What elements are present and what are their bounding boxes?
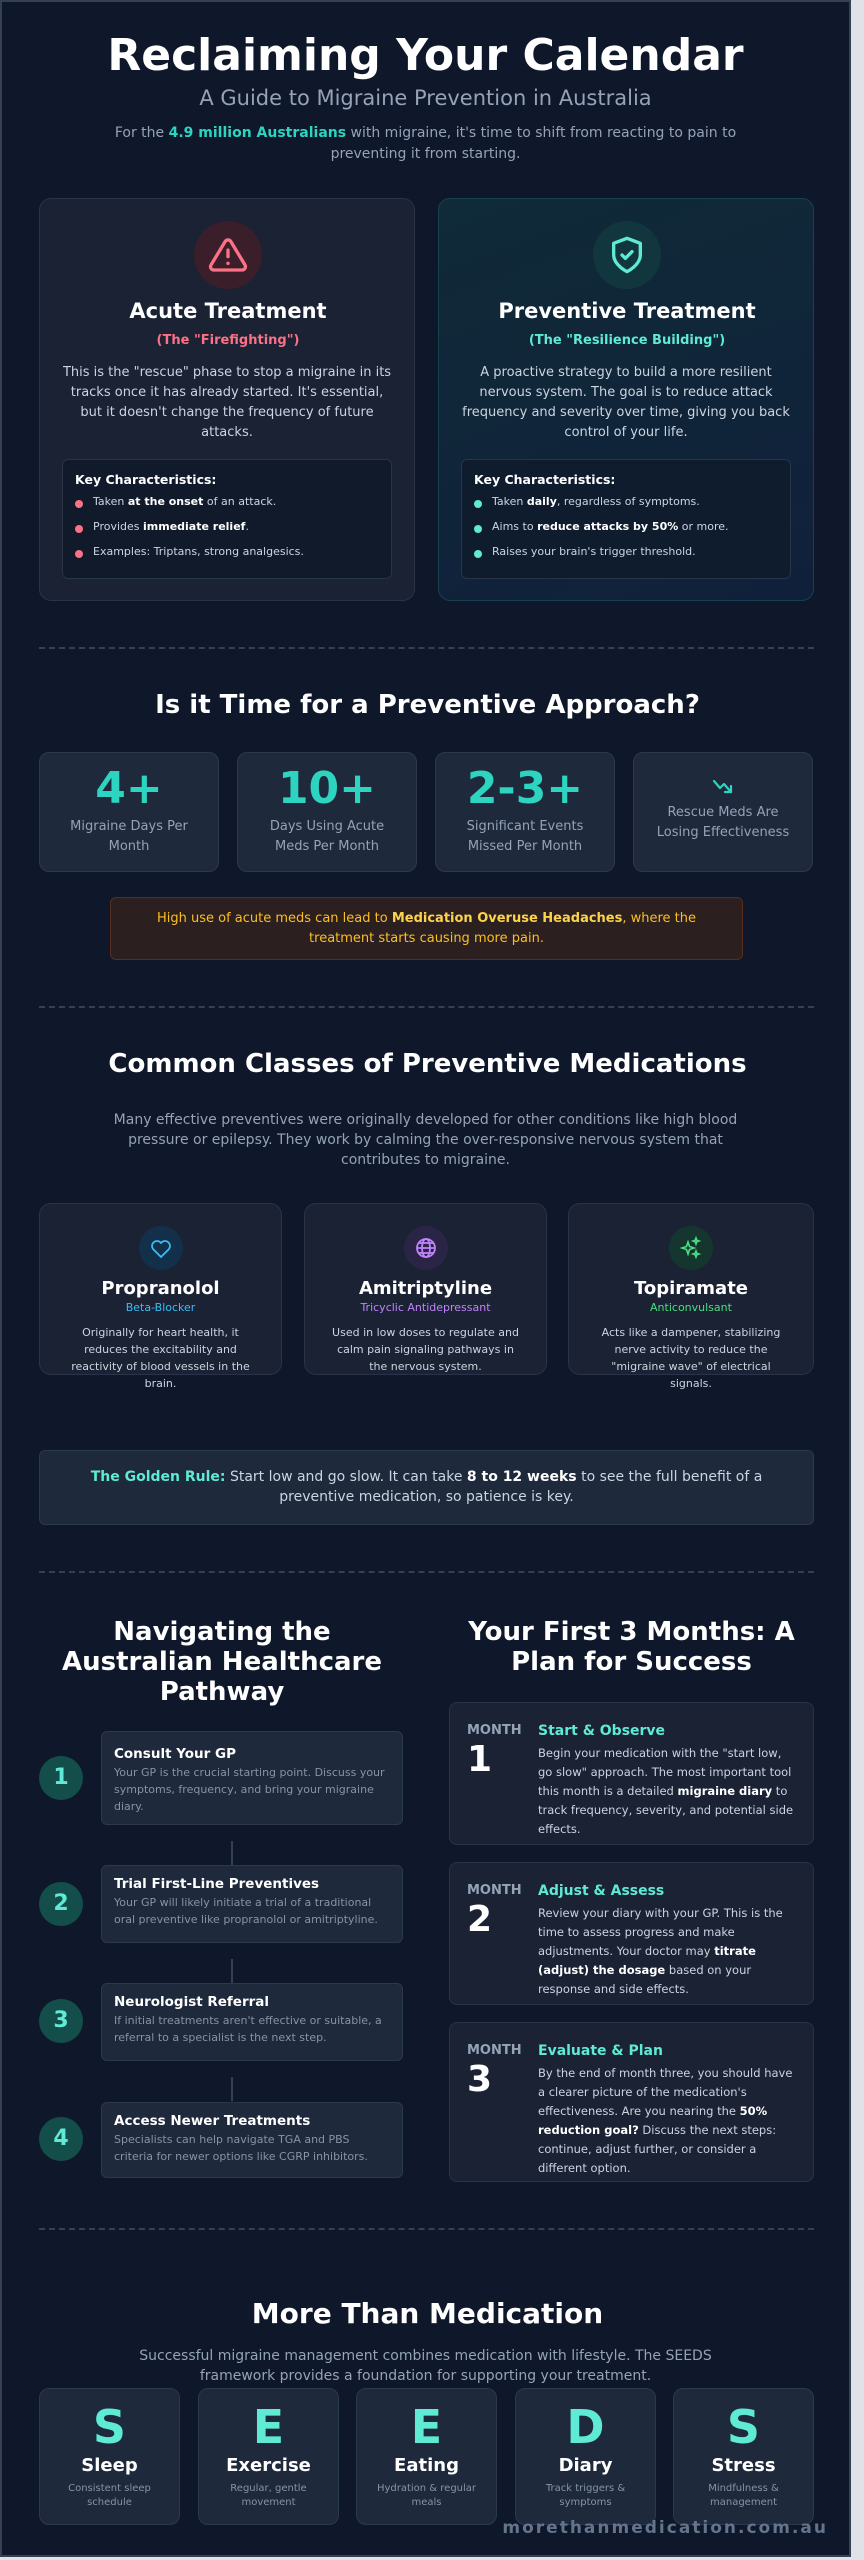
seeds: diary: Diary [559, 2455, 612, 2476]
subheading: (The "Firefighting") [157, 333, 299, 348]
stat: 2-3+: Significant Events Missed Per Month [467, 819, 583, 854]
month 1: Begin your medication with the "start low, go slow" approach. The most important tool this month is a detailed migraine diary to track frequency, severity, and potential side effects. [538, 1746, 793, 1836]
card: propranolol: Originally for heart health, it reduces the excitability and reactivity of blood vessels in the brain. [71, 1326, 250, 1390]
heading: healthcare pathway: Navigating the Australian Healthcare Pathway [62, 1617, 382, 1707]
step 2: 2 [53, 1891, 69, 1916]
intro text: Successful migraine management combines medication with lifestyle. The SEEDS framework provides a foundation for supporting your treatment. [139, 2348, 712, 2384]
seeds: diary: Track triggers & symptoms [546, 2483, 625, 2508]
callout: medication overuse: High use of acute meds can lead to Medication Overuse Headaches, where the treatment starts causing more pain. [157, 911, 696, 946]
card: amitriptyline [304, 1203, 547, 1375]
description: This is the "rescue" phase to stop a migraine in its tracks once it has already started. It's essential, but it doesn't change the frequency of future attacks. [63, 365, 391, 440]
stat: 10+: Days Using Acute Meds Per Month [270, 819, 384, 854]
panel: acute treatment [39, 198, 415, 601]
card: amitriptyline: Tricyclic Antidepressant [360, 1301, 491, 1314]
card: topiramate: Acts like a dampener, stabilizing nerve activity to reduce the "migraine wave" of electrical signals. [602, 1326, 780, 1390]
stat: 10+ [237, 752, 417, 872]
month 3 [449, 2022, 814, 2182]
month 3: Evaluate & Plan [538, 2043, 663, 2059]
step 1: 1 [53, 1765, 69, 1790]
month 1: 1 [467, 1739, 492, 1780]
icon: warning [194, 221, 262, 289]
card: amitriptyline: Amitriptyline [359, 1278, 492, 1299]
key characteristics: Taken daily, regardless of symptoms. [492, 495, 700, 508]
month 2 [449, 1862, 814, 2005]
subtitle: A Guide to Migraine Prevention in Australia [199, 86, 652, 110]
seeds: stress: S [727, 2400, 760, 2454]
card: topiramate [568, 1203, 814, 1375]
key characteristics: Aims to reduce attacks by 50% or more. [492, 520, 729, 533]
seeds: diary: D [566, 2400, 605, 2454]
step 2 [39, 1882, 83, 1926]
subheading: (The "Resilience Building") [529, 333, 725, 348]
seeds: sleep [39, 2388, 180, 2525]
seeds: exercise: Exercise [226, 2455, 311, 2476]
key characteristics: Examples: Triptans, strong analgesics. [93, 545, 304, 558]
seeds: sleep: Consistent sleep schedule [68, 2483, 151, 2508]
stat: 10+: 10+ [278, 763, 376, 814]
key characteristics: Provides immediate relief. [93, 520, 249, 533]
key characteristics: Taken at the onset of an attack. [93, 495, 276, 508]
card: amitriptyline: Used in low doses to regulate and calm pain signaling pathways in the nervous system. [332, 1326, 519, 1373]
seeds: sleep: S [93, 2400, 126, 2454]
card: propranolol: Beta-Blocker [126, 1301, 195, 1314]
step 4: 4 [53, 2126, 69, 2151]
callout: golden rule: The Golden Rule: Start low and go slow. It can take 8 to 12 weeks to see the full benefit of a preventive medication, so patience is key. [91, 1469, 762, 1505]
stat: 2-3+: 2-3+ [467, 763, 583, 814]
key characteristics [62, 459, 392, 579]
step 3: 3 [53, 2008, 69, 2033]
stat: 2-3+ [435, 752, 615, 872]
text: If initial treatments aren't effective or suitable, a referral to a specialist is the next step. [114, 2014, 382, 2044]
month 1: Start & Observe [538, 1723, 665, 1739]
callout: medication overuse [110, 897, 743, 960]
stat: rescue meds: Rescue Meds Are Losing Effectiveness [657, 805, 789, 840]
month 1: MONTH [467, 1723, 522, 1738]
seeds: exercise: Regular, gentle movement [230, 2483, 307, 2508]
card: propranolol: Propranolol [101, 1278, 220, 1299]
seeds: eating: E [411, 2400, 442, 2454]
intro text: Many effective preventives were originally developed for other conditions like high blood pressure or epilepsy. They work by calming the over-responsive nervous system that contributes to migraine. [114, 1112, 737, 1168]
key characteristics: Key Characteristics: [75, 472, 216, 487]
seeds: exercise: E [253, 2400, 284, 2454]
callout: golden rule [39, 1450, 814, 1525]
seeds: eating [356, 2388, 497, 2525]
heading: Acute Treatment [129, 299, 327, 323]
month 2: Adjust & Assess [538, 1883, 664, 1899]
key characteristics [461, 459, 791, 579]
intro text: For the 4.9 million Australians with migraine, it's time to shift from reacting to pain to preventing it from starting. [115, 125, 736, 162]
text: Your GP will likely initiate a trial of a traditional oral preventive like propranolol or amitriptyline. [114, 1896, 378, 1926]
heading: medications: Common Classes of Preventive Medications [108, 1049, 747, 1079]
seeds: stress: Stress [711, 2455, 776, 2476]
text: Specialists can help navigate TGA and PBS criteria for newer options like CGRP inhibitors. [114, 2133, 368, 2163]
step 3 [39, 1999, 83, 2043]
month 2: Review your diary with your GP. This is the time to assess progress and make adjustments. Your doctor may titrate (adjust) the dosage based on your response and side effects. [538, 1906, 783, 1996]
text: Neurologist Referral [114, 1994, 269, 2010]
text: Access Newer Treatments [114, 2113, 310, 2129]
stat: 4+: 4+ [95, 763, 163, 814]
key characteristics: Key Characteristics: [474, 472, 615, 487]
text: Consult Your GP [114, 1746, 236, 1762]
footer: website: morethanmedication.com.au [502, 2518, 828, 2538]
month 2: 2 [467, 1899, 492, 1940]
icon: shield [593, 221, 661, 289]
heading: preventive approach: Is it Time for a Preventive Approach? [155, 690, 700, 720]
text: Trial First-Line Preventives [114, 1876, 319, 1892]
month 1 [449, 1702, 814, 1845]
card: propranolol [39, 1203, 282, 1375]
step 4 [39, 2117, 83, 2161]
stat: 4+ [39, 752, 219, 872]
card: topiramate: Topiramate [634, 1278, 748, 1299]
seeds: exercise [198, 2388, 339, 2525]
heading: more than medication: More Than Medication [252, 2297, 603, 2330]
step 1 [39, 1756, 83, 1800]
stat: 4+: Migraine Days Per Month [70, 819, 188, 854]
panel: preventive treatment [438, 198, 814, 601]
month 3: MONTH [467, 2043, 522, 2058]
key characteristics: Raises your brain's trigger threshold. [492, 545, 696, 558]
seeds: sleep: Sleep [81, 2455, 138, 2476]
month 3: By the end of month three, you should have a clearer picture of the medication's effectiveness. Are you nearing the 50% reduction goal? Discuss the next steps: continue, adjust further, or consider a different option. [538, 2066, 792, 2175]
description: A proactive strategy to build a more resilient nervous system. The goal is to reduce attack frequency and severity over time, giving you back control of your life. [462, 365, 790, 440]
title: Reclaiming Your Calendar [107, 30, 744, 81]
seeds: eating: Hydration & regular meals [377, 2483, 476, 2508]
month 3: 3 [467, 2059, 492, 2100]
seeds: diary [515, 2388, 656, 2525]
seeds: stress [673, 2388, 814, 2525]
seeds: eating: Eating [394, 2455, 459, 2476]
text: Your GP is the crucial starting point. Discuss your symptoms, frequency, and bring your migraine diary. [114, 1766, 385, 1813]
heading: Preventive Treatment [498, 299, 756, 323]
card: topiramate: Anticonvulsant [650, 1301, 732, 1314]
seeds: stress: Mindfulness & management [708, 2483, 779, 2508]
stat: rescue meds [633, 752, 813, 872]
month 2: MONTH [467, 1883, 522, 1898]
heading: first 3 months: Your First 3 Months: A Plan for Success [468, 1617, 795, 1677]
